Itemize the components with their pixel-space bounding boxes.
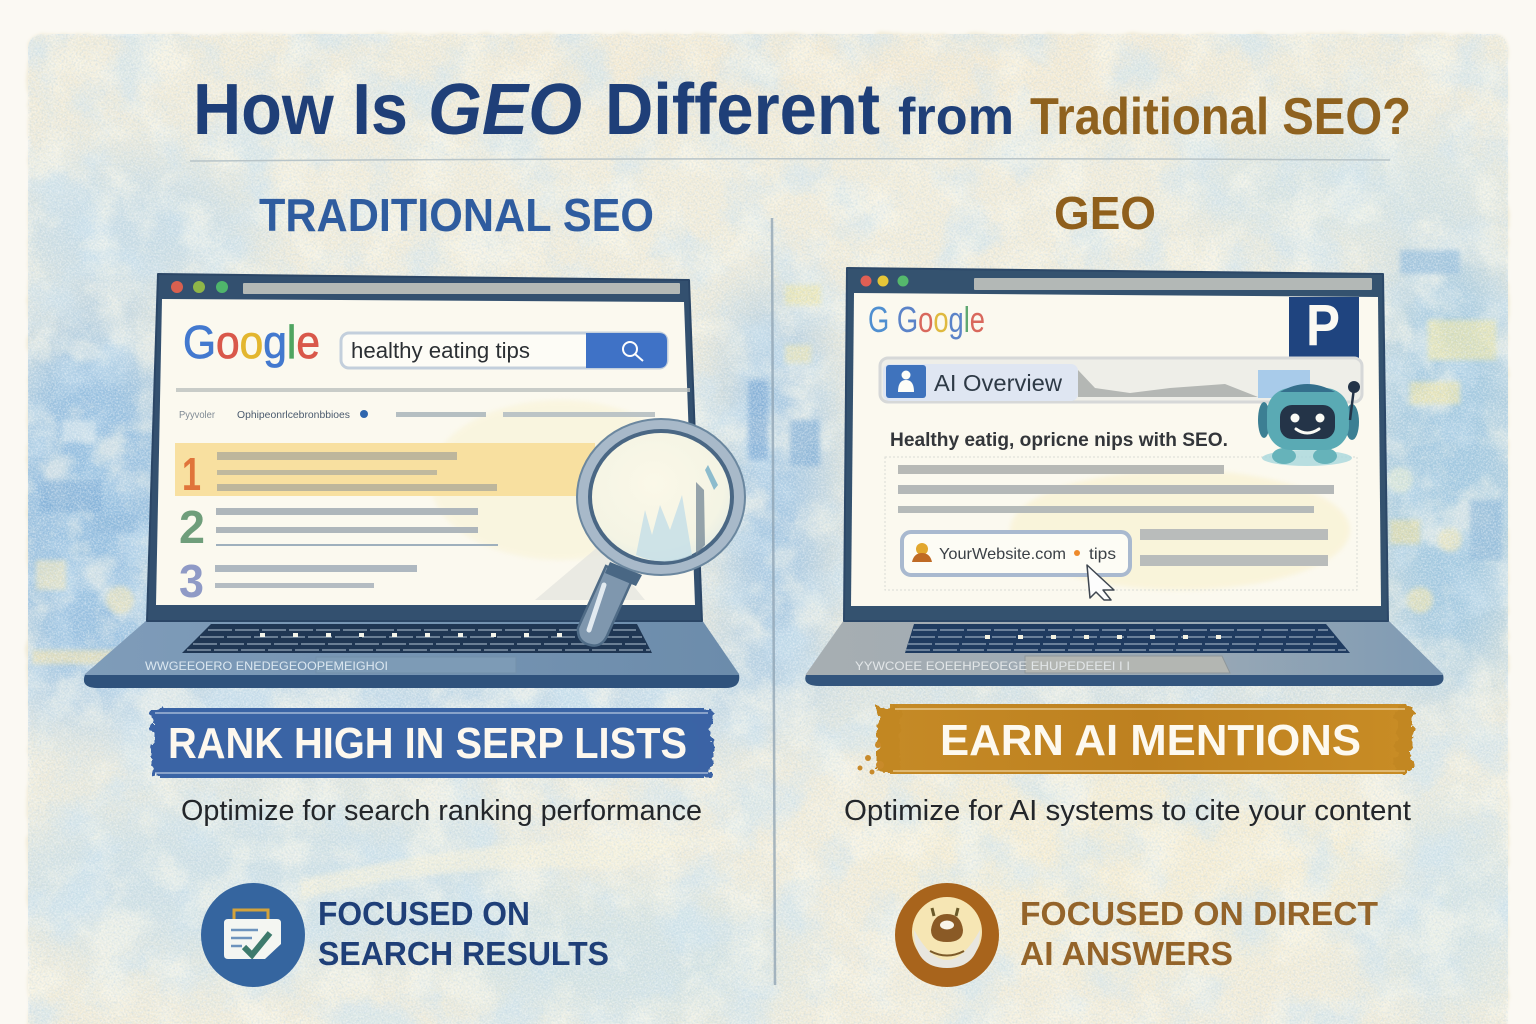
heading: Traditional SEO: TRADITIONAL SEO	[259, 189, 654, 241]
banner: earn AI mentions	[858, 704, 1412, 774]
result 3: 3	[179, 555, 204, 607]
title: How Is	[193, 70, 408, 150]
title: GEO	[428, 70, 582, 150]
icon: checklist badge	[201, 883, 305, 987]
label: focused on search results: SEARCH RESULTS	[318, 935, 609, 972]
icon: mouse cursor	[1087, 565, 1114, 600]
results filter row: Ophipeonrlcebronbbioes	[237, 410, 350, 421]
icon: magnifying glass	[535, 419, 745, 646]
panel: GEO laptop	[805, 268, 1443, 686]
laptop base: YYWCOEE EOEEHPEOEGE EHUPEDEEEI I I	[855, 659, 1130, 673]
panel: traditional SEO laptop	[84, 274, 745, 688]
browser screen	[156, 299, 695, 605]
AI overview bar: AI Overview	[934, 370, 1062, 396]
title: Traditional SEO?	[1030, 88, 1411, 146]
results filter row	[179, 410, 655, 421]
P badge	[1289, 293, 1359, 361]
Google logo: G Google	[868, 299, 985, 340]
title: from	[898, 88, 1014, 146]
result 2	[179, 501, 498, 553]
icon: person	[912, 543, 932, 562]
label: focused on direct AI answers: FOCUSED ON DIRECT	[1020, 895, 1378, 932]
AI answer text block	[885, 430, 1357, 590]
AI overview bar	[880, 358, 1362, 402]
result 3	[179, 555, 417, 607]
P badge: P	[1306, 293, 1340, 358]
browser screen	[851, 293, 1381, 606]
icon: AI face badge	[895, 883, 999, 987]
title: Different	[605, 70, 880, 150]
search box	[341, 333, 667, 368]
result 1 highlighted	[175, 443, 595, 500]
label: focused on search results: FOCUSED ON	[318, 895, 530, 932]
laptop base: WWGEEOERO ENEDEGEOOPEMEIGHOI	[145, 659, 388, 673]
browser traffic lights	[860, 276, 908, 286]
result 1 highlighted: 1	[182, 448, 201, 500]
banner: earn AI mentions: EARN AI MENTIONS	[940, 716, 1361, 765]
banner: rank high in SERP lists	[152, 708, 712, 778]
label: focused on direct AI answers: AI ANSWERS	[1020, 935, 1233, 972]
caption: search ranking: Optimize for search ranking performance	[181, 795, 702, 827]
result 2: 2	[179, 501, 205, 553]
citation chip: tips	[1089, 546, 1116, 563]
results filter row: Pyyvoler	[179, 410, 216, 421]
icon: robot mascot	[1258, 381, 1360, 466]
laptop screen bezel	[844, 268, 1388, 621]
search box: healthy eating tips	[351, 338, 530, 363]
laptop base	[805, 620, 1443, 686]
title	[193, 70, 1411, 150]
caption: AI citation: Optimize for AI systems to cite your content	[844, 795, 1411, 827]
Google logo: Google	[183, 316, 320, 368]
laptop screen bezel	[147, 274, 702, 621]
AI answer text block: Healthy eatig, opricne nips with SEO.	[890, 430, 1228, 451]
laptop base	[84, 620, 739, 688]
label: focused on search results	[318, 895, 609, 972]
banner: rank high in SERP lists: RANK HIGH IN SERP LISTS	[168, 719, 687, 768]
heading: GEO: GEO	[1054, 187, 1156, 239]
browser traffic lights	[171, 281, 228, 293]
label: focused on direct AI answers	[1020, 895, 1378, 972]
citation chip: YourWebsite.com	[939, 546, 1066, 563]
icon: AI overview user	[886, 365, 926, 398]
citation chip	[902, 532, 1130, 575]
icon: search	[623, 342, 643, 361]
